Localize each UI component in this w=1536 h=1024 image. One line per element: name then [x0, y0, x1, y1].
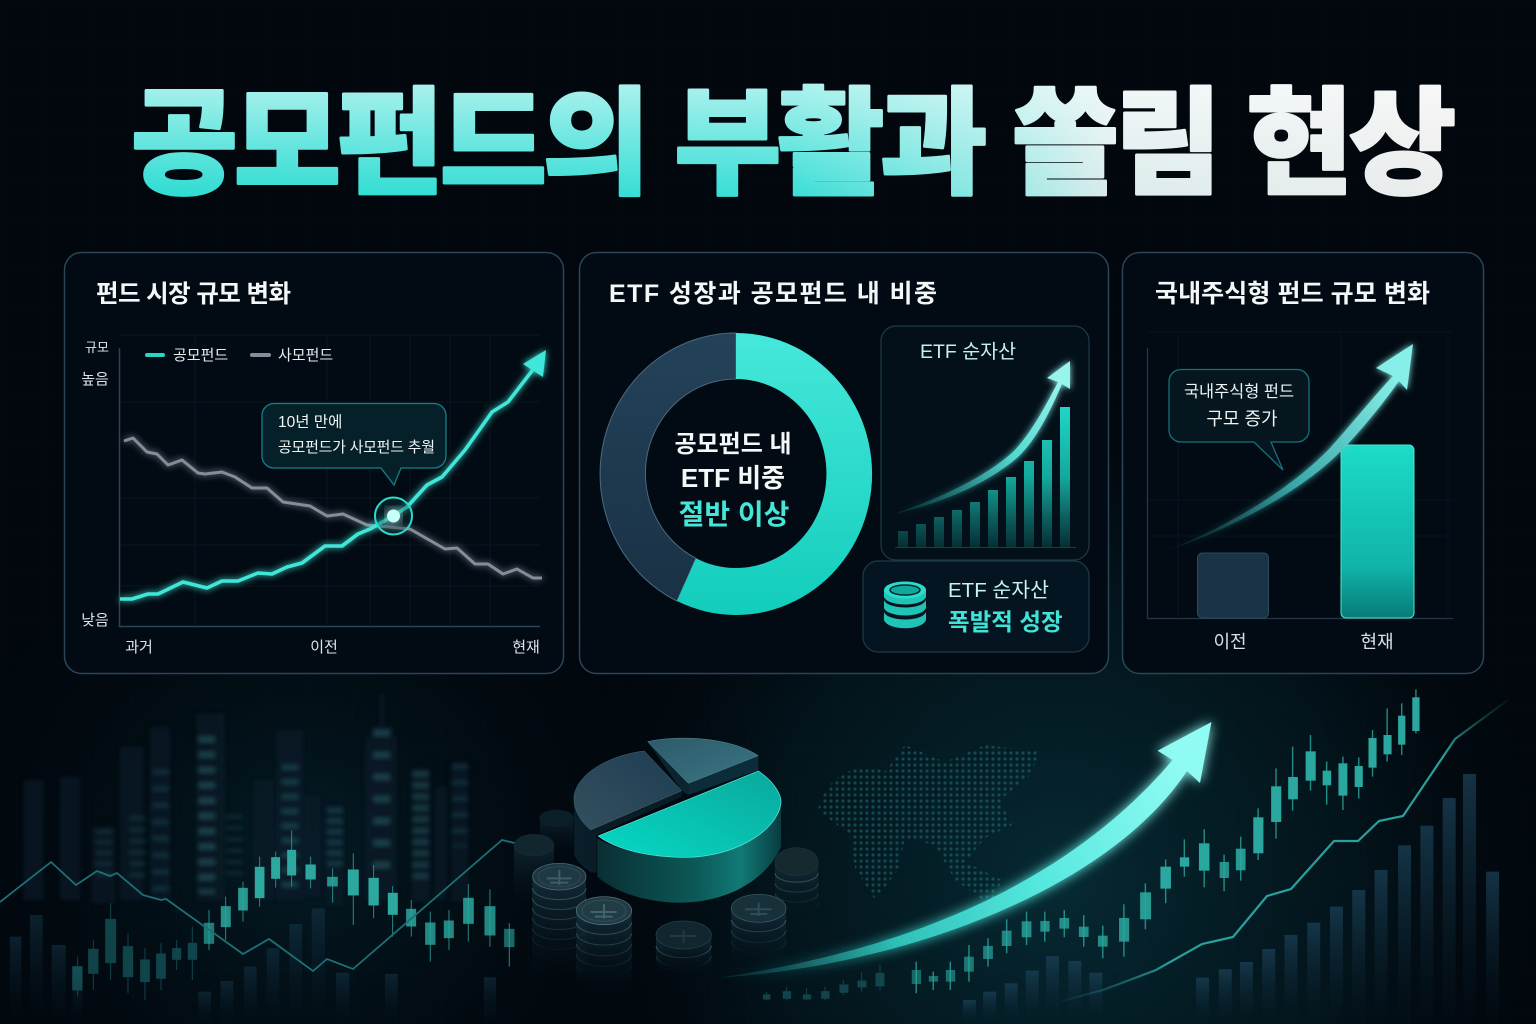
axis label: scale — [81, 340, 109, 629]
donut center label: ETF 비중 — [681, 463, 785, 493]
axis label: scale: 낮음 — [81, 612, 109, 629]
legend: 공모펀드 — [173, 347, 228, 364]
coin stack: front right — [731, 894, 786, 964]
background: left volume bars — [10, 908, 496, 1024]
panel: domestic equity fund size — [1122, 252, 1484, 674]
background: blurred city skyline — [23, 693, 468, 905]
panel: fund market size change — [64, 252, 564, 674]
pie slice: mid side — [648, 738, 758, 795]
card: explosive growth note — [863, 561, 1089, 652]
callout: crossover: 10년 만에 — [278, 413, 342, 431]
callout: crossover — [262, 404, 446, 485]
3D pie chart — [574, 738, 781, 903]
background: right volume bars — [963, 774, 1499, 1024]
axis label: time — [125, 639, 540, 656]
bar: previous — [1198, 553, 1268, 618]
big rising arrow — [715, 722, 1212, 978]
legend — [145, 347, 333, 364]
donut center label: 공모펀드 내 — [674, 431, 792, 458]
line: public funds with arrow — [120, 350, 546, 599]
callout: size increase: 국내주식형 펀드 — [1184, 383, 1294, 401]
callout: size increase — [1169, 370, 1309, 470]
pie slice: dark side — [574, 751, 682, 873]
callout: size increase: 구모 증가 — [1206, 409, 1278, 429]
axis label: scale: 높음 — [81, 371, 109, 388]
donut center label — [674, 431, 792, 530]
icon: coin stack — [884, 582, 926, 628]
chart axes — [120, 348, 540, 626]
background: right trend line — [1062, 700, 1508, 1001]
axis label: time: 이전 — [310, 639, 338, 656]
axis label: time: 현재 — [512, 639, 540, 656]
growth arrow — [1163, 344, 1413, 552]
growth arrow — [894, 361, 1070, 514]
title: 공모펀드의 부활과 쏠림 현상 — [131, 79, 1456, 209]
axis labels — [1213, 632, 1394, 652]
coin stack: front center — [656, 921, 711, 973]
card label: ETF 순자산 — [920, 341, 1016, 363]
card: ETF net assets chart — [881, 326, 1089, 560]
background: left trend line — [0, 840, 534, 971]
donut segment: ETF share — [677, 333, 872, 615]
panel heading: ETF 성장과 공모펀드 내 비중 — [609, 280, 937, 308]
panel: ETF growth and share — [580, 252, 1108, 674]
coin stack: right back — [775, 848, 818, 917]
donut center label: 절반 이상 — [679, 499, 789, 530]
pie slice: teal main — [597, 771, 781, 903]
legend: 사모펀드 — [278, 347, 333, 364]
coin stack: rear left — [514, 834, 554, 901]
card: explosive growth note: 폭발적 성장 — [948, 609, 1063, 635]
panel heading: 국내주식형 펀드 규모 변화 — [1155, 280, 1430, 308]
donut segment: other — [600, 333, 736, 601]
axis labels: 현재 — [1360, 632, 1394, 652]
callout: crossover: 공모펀드가 사모펀드 추월 — [278, 439, 435, 456]
axis label: time: 과거 — [125, 639, 153, 656]
coin stack: front left — [576, 897, 632, 993]
axis labels: 이전 — [1213, 632, 1247, 652]
bar: current — [1341, 445, 1414, 618]
coin stack: left tall — [532, 863, 586, 977]
coin stack: back left — [539, 810, 574, 855]
crossover marker — [375, 498, 412, 534]
chart grid and axis — [1147, 332, 1453, 618]
panel heading: 펀드 시장 규모 변화 — [96, 280, 291, 308]
background: faint small candles — [763, 965, 884, 1000]
bar chart — [898, 407, 1070, 547]
note text: ETF 순자산 — [948, 579, 1049, 602]
chart grid — [120, 335, 540, 626]
background: world map dots — [818, 745, 1040, 905]
background: left candlestick chart — [73, 831, 514, 1000]
background: right candlestick chart — [912, 689, 1420, 993]
donut chart — [600, 333, 872, 615]
coin stacks — [514, 810, 818, 993]
line: private funds — [124, 438, 542, 578]
axis label: scale: 규모 — [85, 340, 109, 355]
